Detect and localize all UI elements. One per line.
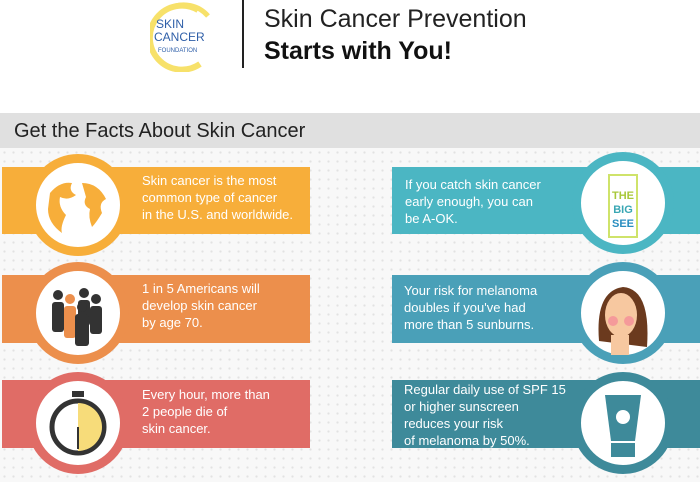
text: 2 people die of	[142, 404, 227, 419]
panel: sunburns	[392, 262, 700, 364]
text: reduces your risk	[404, 416, 503, 431]
icon: stopwatch	[27, 372, 129, 474]
icon: globe	[27, 154, 129, 256]
title: Starts with You!	[264, 37, 452, 65]
panel: every hour	[2, 372, 310, 474]
text	[404, 283, 538, 332]
text: Your risk for melanoma	[404, 283, 537, 298]
text: skin cancer.	[142, 421, 211, 436]
icon: people	[27, 262, 129, 364]
text: Every hour, more than	[142, 387, 270, 402]
panel: most common	[2, 154, 310, 256]
logo: SKIN	[156, 17, 184, 31]
title	[242, 0, 527, 68]
text: more than 5 sunburns.	[404, 317, 534, 332]
icon: sunburned face	[572, 262, 674, 364]
text	[404, 382, 566, 448]
icon: the big see: SEE	[612, 218, 634, 230]
text: in the U.S. and worldwide.	[142, 207, 293, 222]
text	[142, 281, 260, 330]
text: develop skin cancer	[142, 298, 257, 313]
text: common type of cancer	[142, 190, 277, 205]
text: by age 70.	[142, 315, 203, 330]
section heading	[0, 113, 700, 148]
section heading: Get the Facts About Skin Cancer	[14, 120, 305, 142]
text: early enough, you can	[405, 194, 533, 209]
text: of melanoma by 50%.	[404, 433, 530, 448]
text: be A-OK.	[405, 211, 458, 226]
panel: sunscreen	[392, 372, 700, 474]
text	[142, 387, 270, 436]
icon: the big see	[572, 152, 674, 254]
text: 1 in 5 Americans will	[142, 281, 260, 296]
text: Skin cancer is the most	[142, 173, 276, 188]
panel: catch early	[392, 152, 700, 254]
text: If you catch skin cancer	[405, 177, 541, 192]
icon: the big see: BIG	[613, 204, 633, 216]
icon: sunscreen tube	[572, 372, 674, 474]
logo: CANCER	[154, 30, 205, 44]
logo: FOUNDATION	[158, 48, 197, 54]
title: Skin Cancer Prevention	[264, 5, 527, 33]
text: or higher sunscreen	[404, 399, 519, 414]
icon: the big see: THE	[612, 190, 634, 202]
text: Regular daily use of SPF 15	[404, 382, 566, 397]
text: doubles if you've had	[404, 300, 526, 315]
panel: 1 in 5	[2, 262, 310, 364]
text	[142, 173, 293, 222]
text	[405, 177, 541, 226]
logo	[150, 2, 210, 72]
